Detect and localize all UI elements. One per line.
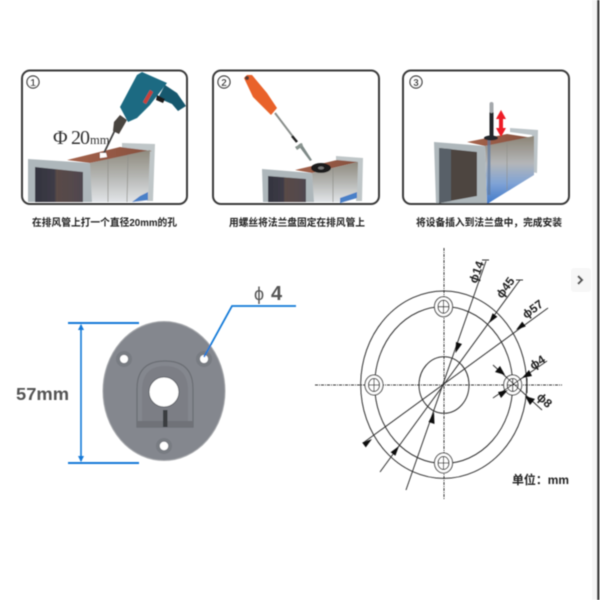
badge: step 2: 2 [221, 78, 227, 89]
right edge strip [592, 0, 599, 600]
dimension labels: ϕ45 [493, 274, 518, 301]
hole marker [100, 153, 107, 158]
label: 57mm: 57mm [16, 384, 69, 404]
drawing circles [361, 291, 527, 478]
leader lines [363, 260, 548, 490]
badge: step 2 [218, 76, 230, 89]
frame: step 1 [22, 70, 187, 204]
label: hole diameter 4: 4 [271, 283, 283, 305]
icon: screwdriver [244, 75, 312, 161]
panel: step 1 drill hole [22, 70, 187, 204]
badge: step 3 [410, 76, 422, 89]
label: hole diameter: 0 [80, 127, 90, 149]
label: hole diameter 4: ϕ [254, 284, 264, 304]
photo: flange plate [103, 322, 225, 460]
caption: step 3: 将设备插入到法兰盘中，完成安装 [416, 216, 562, 229]
dimension labels: ϕ4 [527, 352, 548, 373]
icon: drill [103, 72, 186, 155]
plate screw holes [116, 351, 212, 454]
plate center boss [137, 361, 193, 427]
icon: flange washer [311, 163, 331, 173]
duct: step 1 [28, 143, 155, 202]
technical drawing [315, 248, 562, 499]
dimension labels: ϕ57 [520, 297, 546, 321]
caption: step 1: 在排风管上打一个直径20mm的孔 [32, 216, 177, 229]
icon: red double arrow [496, 110, 506, 137]
panel: step 3 insert device [403, 70, 569, 204]
icon: device probe [484, 102, 498, 195]
frame: step 2 [213, 70, 379, 204]
dimension labels [466, 259, 555, 411]
dimension labels: ϕ8 [534, 390, 555, 411]
note: unit: 单位：mm [512, 472, 569, 487]
badge: step 3: 3 [413, 78, 419, 89]
label: hole diameter: 2 [71, 127, 81, 149]
label: hole diameter: Φ [53, 127, 68, 149]
badge: step 1: 1 [30, 78, 36, 89]
arrowheads [362, 313, 535, 456]
duct: step 3 [434, 128, 538, 204]
badge: step 1 [27, 76, 39, 89]
duct: step 2 [262, 156, 363, 203]
drawing bolt holes [365, 297, 527, 473]
dimension labels: ϕ14 [466, 259, 487, 285]
dimension: 57mm height [68, 323, 139, 463]
caption: step 2: 用螺丝将法兰盘固定在排风管上 [229, 216, 365, 229]
frame: step 3 [403, 70, 569, 204]
leader: hole callout [204, 306, 296, 357]
panel: step 2 screw flange [213, 70, 379, 204]
center lines [315, 248, 562, 499]
nav tab [571, 268, 591, 292]
label: hole diameter: mm [90, 133, 110, 147]
